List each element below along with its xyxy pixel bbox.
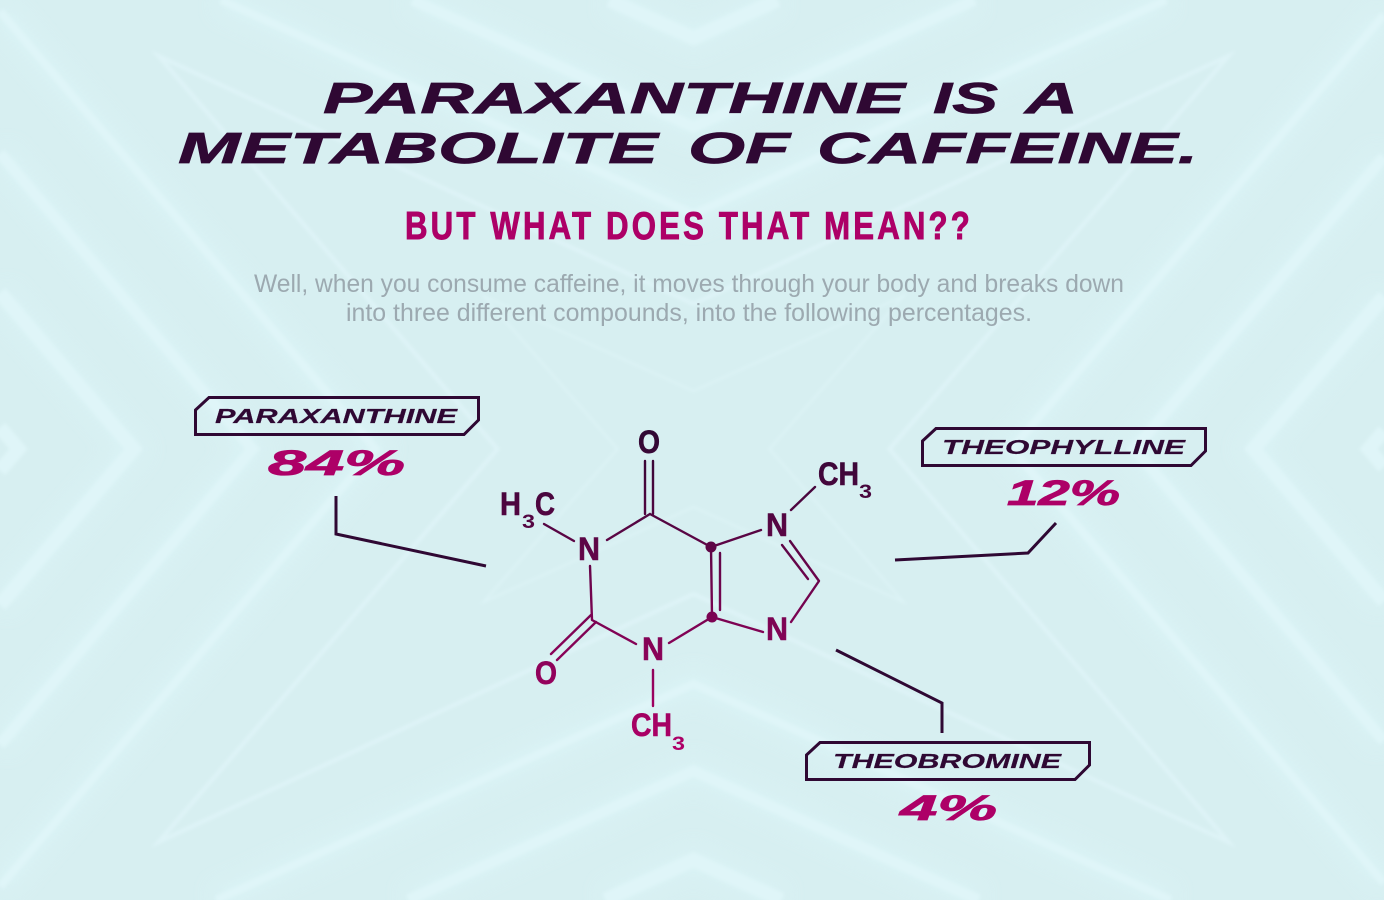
theobromine label: THEOBROMINE: [833, 751, 1062, 773]
molecule atom labels: 3: [859, 482, 872, 503]
paraxanthine label: PARAXANTHINE: [215, 406, 458, 428]
molecule atom labels: H: [500, 486, 521, 522]
theophylline percentage: 12%: [1007, 474, 1120, 513]
molecule atom labels: CH: [631, 707, 672, 743]
intro text: [254, 270, 1124, 327]
intro text: into three different compounds, into the following percentages.: [346, 299, 1032, 327]
theophylline label box: [922, 428, 1206, 466]
theobromine label box: [806, 742, 1090, 780]
intro text: Well, when you consume caffeine, it moves through your body and breaks down: [254, 270, 1124, 298]
molecule atom labels: N: [642, 631, 664, 667]
paraxanthine leader line: [336, 496, 486, 566]
title: METABOLITE: [178, 124, 661, 173]
molecule atom labels: [500, 424, 872, 755]
title: PARAXANTHINE: [323, 74, 908, 123]
molecule atom labels: 3: [672, 734, 685, 755]
molecule atom labels: N: [766, 507, 788, 543]
caffeine molecule diagram: [500, 424, 872, 755]
subtitle: BUT WHAT DOES THAT MEAN??: [405, 205, 970, 248]
title: A: [1023, 74, 1078, 123]
molecule atom labels: CH: [818, 456, 859, 492]
callout: paraxanthine: [196, 398, 486, 566]
paraxanthine label box: [196, 398, 478, 434]
title: CAFFEINE.: [817, 124, 1198, 173]
molecule bonds: [544, 461, 819, 706]
paraxanthine percentage: 84%: [268, 444, 405, 483]
title: OF: [688, 124, 792, 173]
theophylline leader line: [895, 523, 1056, 560]
molecule atom labels: N: [766, 611, 788, 647]
molecule atom labels: 3: [522, 512, 535, 533]
callout: theobromine: [806, 650, 1090, 828]
theobromine percentage: 4%: [898, 789, 997, 828]
molecule atom labels: O: [638, 424, 660, 460]
molecule atom labels: O: [535, 655, 557, 691]
theophylline label: THEOPHYLLINE: [942, 437, 1186, 459]
molecule junction dots: [706, 542, 718, 622]
molecule atom labels: C: [535, 486, 555, 522]
molecule atom labels: N: [578, 531, 600, 567]
title: IS: [933, 74, 998, 123]
title: [178, 74, 1198, 173]
theobromine leader line: [836, 650, 942, 733]
callout: theophylline: [895, 428, 1206, 560]
